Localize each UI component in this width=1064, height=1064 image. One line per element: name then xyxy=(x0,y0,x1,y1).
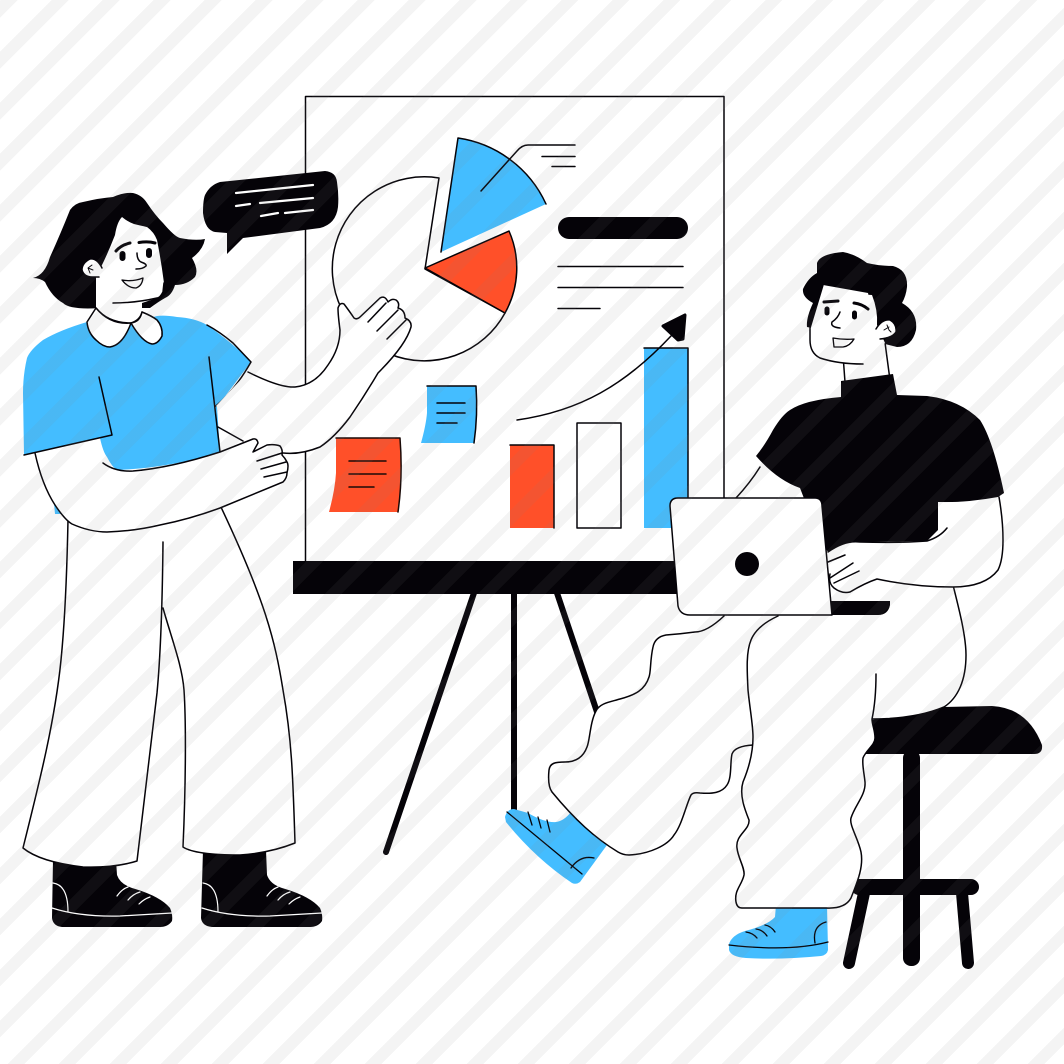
man ear xyxy=(876,320,896,339)
stool post xyxy=(903,750,920,966)
board right leg xyxy=(556,590,597,712)
woman trousers back leg outline xyxy=(163,505,295,855)
pie blue sector outline xyxy=(441,138,546,252)
blue bar edge xyxy=(644,348,688,528)
man front trouser outline xyxy=(736,585,966,908)
stool seat xyxy=(865,706,1042,754)
man mouth xyxy=(833,338,854,347)
man standing shoe xyxy=(729,905,828,959)
woman lower arm and hand xyxy=(35,439,288,532)
pie orange sector xyxy=(425,231,517,313)
left shoe details xyxy=(52,883,172,916)
growth arrow line xyxy=(517,336,671,420)
stool foot rest xyxy=(851,879,979,895)
bubble shape xyxy=(203,171,338,254)
board centre leg xyxy=(511,590,517,815)
bar chart with growth arrow xyxy=(510,315,688,528)
sticky notes xyxy=(329,386,477,512)
heading bar xyxy=(558,217,688,239)
woman ear mark xyxy=(88,265,93,273)
man rear trouser leg outline xyxy=(549,616,753,855)
woman ear xyxy=(82,259,102,277)
woman shirt xyxy=(23,316,251,470)
man neck xyxy=(843,335,890,382)
woman mouth xyxy=(122,278,143,288)
man eyes xyxy=(827,309,854,317)
speech bubble xyxy=(203,171,338,254)
man front trouser leg and hip xyxy=(736,560,966,908)
orange sticky note xyxy=(329,438,401,512)
pie main white sector xyxy=(332,177,505,361)
woman eyes xyxy=(122,251,149,258)
stool back legs xyxy=(849,893,968,963)
woman left shoe xyxy=(52,860,172,927)
standing woman xyxy=(23,193,411,927)
woman neck lower line xyxy=(96,308,142,323)
pie blue sector xyxy=(441,138,546,252)
blue bar xyxy=(644,348,688,528)
body lines xyxy=(558,266,683,308)
woman trousers front leg outline xyxy=(23,520,163,867)
woman right shoe xyxy=(201,850,322,927)
blue note edge and lines xyxy=(427,386,477,443)
standing shoe body xyxy=(729,905,828,959)
woman shirt hem sliver xyxy=(54,503,63,514)
easel and presentation board xyxy=(293,96,724,852)
woman jaw line xyxy=(113,283,164,303)
woman trousers front leg fill xyxy=(23,510,164,867)
man jaw line xyxy=(810,285,863,364)
woman shirt sleeve outlines xyxy=(24,325,251,455)
man eyebrows xyxy=(824,301,868,309)
woman raised arm and hand xyxy=(216,297,411,453)
board left leg xyxy=(386,590,475,852)
raised shoe details xyxy=(507,812,594,874)
laptop base xyxy=(828,601,890,615)
laptop lid xyxy=(670,498,832,615)
orange bar edge xyxy=(510,445,554,528)
pie chart xyxy=(332,138,575,361)
raised arm outline xyxy=(218,297,411,453)
bubble text lines xyxy=(236,185,313,216)
man hair xyxy=(803,252,916,347)
woman trousers back leg fill xyxy=(140,505,295,855)
pie callout lines xyxy=(481,145,575,191)
orange bar xyxy=(510,445,554,528)
orange note edge and lines xyxy=(336,438,401,512)
man shirt xyxy=(756,374,1004,552)
man right arm and hand xyxy=(826,497,1003,592)
man rear trouser leg fill xyxy=(549,612,790,855)
laptop logo dot xyxy=(735,552,759,576)
seated man xyxy=(505,252,1004,959)
man left arm xyxy=(736,467,760,498)
blue sticky note xyxy=(421,386,477,443)
man face xyxy=(810,285,885,364)
man nose xyxy=(832,312,840,328)
text placeholder block xyxy=(558,217,688,308)
growth arrow head xyxy=(663,315,685,340)
man arm outline xyxy=(828,497,1003,592)
woman collar xyxy=(87,308,162,347)
woman neck and face xyxy=(96,217,164,328)
man raised shoe xyxy=(505,809,607,884)
woman nose xyxy=(136,253,146,269)
stool xyxy=(849,706,1042,966)
board panel xyxy=(306,96,724,562)
left shoe body xyxy=(52,860,172,927)
woman hair xyxy=(33,193,205,308)
raised shoe body xyxy=(505,809,607,884)
lower arm outline xyxy=(35,439,288,532)
board tray xyxy=(293,561,685,594)
woman eyebrows xyxy=(116,242,155,251)
standing shoe details xyxy=(729,922,828,948)
collar left lobe xyxy=(87,308,131,347)
right shoe body xyxy=(201,850,322,927)
collar right lobe xyxy=(131,312,162,344)
right shoe details xyxy=(202,883,322,916)
man ear mark xyxy=(884,325,891,332)
white bar xyxy=(577,423,621,528)
